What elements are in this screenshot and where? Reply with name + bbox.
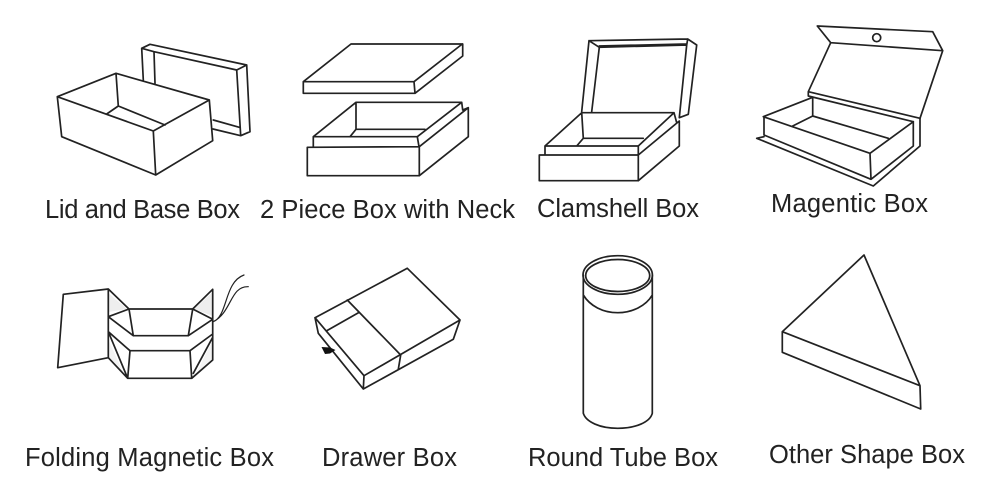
panel: folding magnetic box — [25, 275, 274, 472]
panel: magentic box — [757, 26, 943, 218]
label: lid and base box: Lid and Base Box — [45, 196, 240, 224]
icon: other shape box — [782, 255, 921, 409]
label: 2 piece box with neck: 2 Piece Box with Neck — [260, 196, 515, 224]
icon: drawer box — [315, 268, 460, 389]
icon: drawer pull tab — [322, 347, 336, 354]
panel: other shape box — [769, 255, 965, 469]
icon: round tube box — [583, 256, 652, 428]
icon: magentic box — [757, 26, 943, 186]
panel: 2 piece box with neck — [260, 44, 515, 224]
panel: drawer box — [315, 268, 460, 472]
label: clamshell box: Clamshell Box — [537, 195, 699, 223]
label: folding magnetic box: Folding Magnetic Box — [25, 444, 274, 472]
panel: clamshell box — [537, 39, 699, 223]
label: other shape box: Other Shape Box — [769, 441, 965, 469]
panel: round tube box — [528, 256, 718, 472]
label: round tube box: Round Tube Box — [528, 444, 718, 472]
panel: lid and base box — [45, 44, 250, 224]
icon: folding magnetic box — [58, 275, 248, 378]
icon: 2 piece box with neck — [303, 44, 468, 176]
icon: lid and base box — [57, 44, 250, 175]
label: magentic box: Magentic Box — [771, 190, 928, 218]
label: drawer box: Drawer Box — [322, 444, 457, 472]
icon: clamshell box — [539, 39, 697, 181]
